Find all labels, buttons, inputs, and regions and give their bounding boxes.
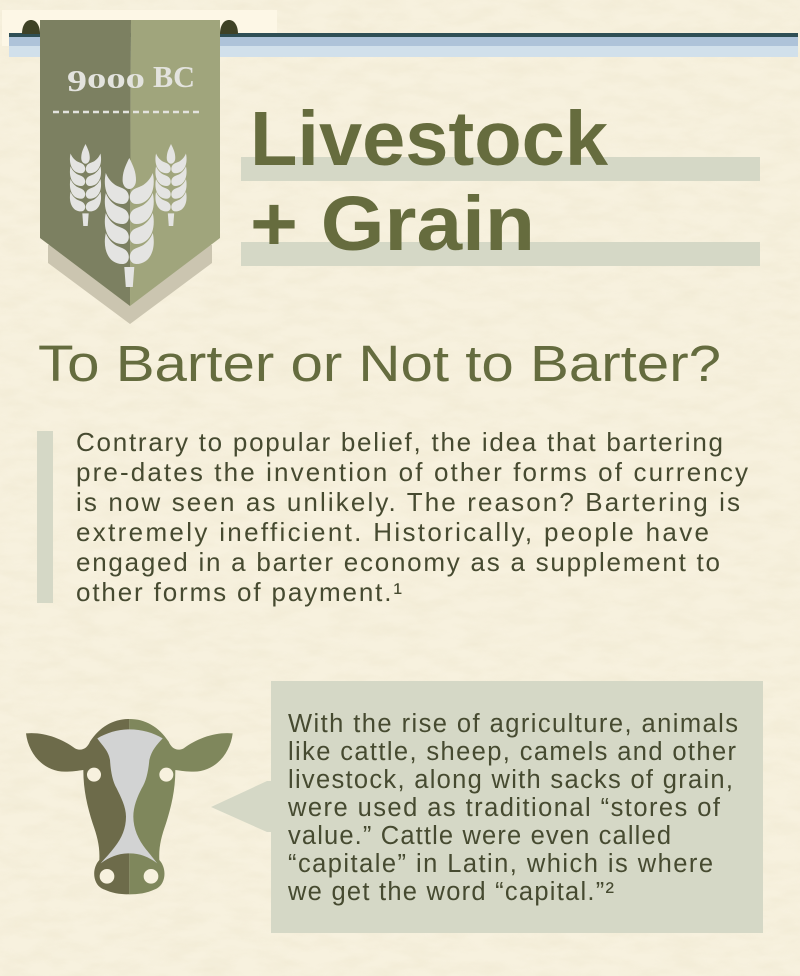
banner date: 9: [67, 63, 87, 98]
top ribbon stripes: [9, 33, 798, 57]
icon: wheat stalks: [70, 144, 187, 287]
callout text: [287, 710, 738, 906]
banner date: [67, 59, 195, 98]
callout text: With the rise of agriculture, animals: [288, 710, 738, 738]
subheading: To Barter or Not to Barter?: [38, 335, 721, 392]
banner shadow: [48, 245, 212, 324]
title: [250, 96, 608, 267]
intro paragraph: Contrary to popular belief, the idea that bartering: [76, 427, 723, 457]
callout text: like cattle, sheep, camels and other: [288, 738, 736, 766]
callout text: were used as traditional “stores of: [287, 794, 721, 822]
cow eyes and nostrils: [87, 768, 173, 884]
cow face patch: [97, 729, 163, 863]
banner right half: [130, 20, 220, 306]
dashed divider: [53, 111, 202, 113]
intro paragraph: is now seen as unlikely. The reason? Bartering is: [76, 487, 740, 517]
cow left half: [26, 719, 129, 894]
title: + Grain: [250, 181, 535, 267]
callout text: we get the word “capital.”²: [287, 878, 614, 906]
intro accent bar: [37, 431, 53, 603]
callout text: value.” Cattle were even called: [288, 822, 671, 850]
banner curls: [22, 20, 238, 34]
callout pointer: [211, 781, 272, 832]
banner date: BC: [153, 59, 195, 94]
banner date: 000: [87, 69, 145, 93]
large wheat: [105, 158, 154, 287]
intro paragraph: pre-dates the invention of other forms of currency: [76, 457, 748, 487]
callout: capital: [211, 681, 763, 933]
banner left half: [40, 20, 131, 306]
intro paragraph: extremely inefficient. Historically, people have: [76, 517, 709, 547]
title highlight bars: [241, 157, 760, 266]
cow right half: [129, 719, 233, 894]
banner: 9000 BC: [22, 20, 238, 324]
intro paragraph: engaged in a barter economy as a supplement to: [76, 547, 720, 577]
callout box: [271, 681, 763, 933]
title: Livestock: [250, 96, 608, 182]
intro paragraph: [76, 427, 748, 607]
small wheat right: [155, 144, 187, 226]
icon: cow head: [26, 719, 233, 894]
callout text: livestock, along with sacks of grain,: [288, 766, 733, 794]
small wheat left: [70, 144, 101, 226]
callout text: “capitale” in Latin, which is where: [288, 850, 713, 878]
intro paragraph: other forms of payment.¹: [76, 577, 402, 607]
